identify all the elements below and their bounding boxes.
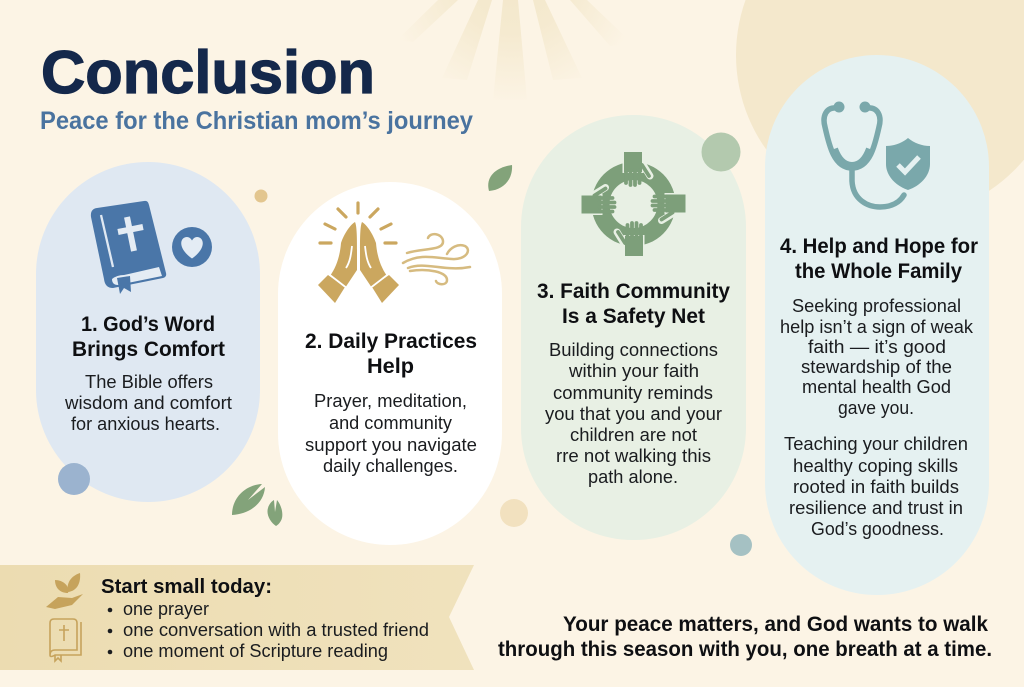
body text <box>545 340 722 487</box>
body text: paragraph one <box>780 296 974 418</box>
icon: stethoscope and shield <box>824 102 930 207</box>
background circle <box>736 0 1024 218</box>
body text: paragraph two: Teaching your children <box>784 434 968 454</box>
panel: Help and Hope <box>765 55 989 595</box>
icon: outlined Bible <box>50 619 81 661</box>
heading: 2. Daily Practices <box>305 330 477 353</box>
closing message <box>498 613 992 661</box>
closing message: through this season with you, one breath at a time. <box>498 638 992 661</box>
body text: Building connections <box>549 340 718 360</box>
body text: paragraph one: faith — it’s good <box>808 337 946 357</box>
bullet list: one prayer <box>123 599 209 619</box>
leaves <box>232 484 282 526</box>
panel: God's Word <box>36 162 260 502</box>
heading: Is a Safety Net <box>562 305 705 328</box>
body text <box>64 372 232 434</box>
body text: wisdom and comfort <box>64 393 232 413</box>
heading: Brings Comfort <box>72 338 225 361</box>
body text <box>305 391 477 476</box>
icon: sprout in hand <box>46 573 83 609</box>
decorative dot: blue <box>58 463 90 495</box>
panel: Faith Community <box>521 115 746 540</box>
leaf <box>488 165 512 191</box>
body text: children are not <box>570 425 697 445</box>
icon: praying hands <box>318 203 470 303</box>
body text: paragraph one: stewardship of the <box>801 357 952 377</box>
icon: wind <box>403 234 470 284</box>
icon: Bible with heart <box>91 201 212 294</box>
body text: within your faith <box>568 361 699 381</box>
heading: Help <box>367 355 414 378</box>
body text: rre not walking this <box>556 446 711 466</box>
panel: Daily Practices <box>278 182 502 545</box>
heading <box>780 235 978 283</box>
body text: The Bible offers <box>85 372 213 392</box>
body text: paragraph two <box>784 434 968 539</box>
bullet list: one moment of Scripture reading <box>123 641 388 661</box>
heading: 3. Faith Community <box>537 280 730 303</box>
body text: for anxious hearts. <box>71 414 220 434</box>
banner: start small today <box>0 565 474 670</box>
body text: paragraph two: God’s goodness. <box>811 519 944 539</box>
heading <box>537 280 730 328</box>
body text: you that you and your <box>545 404 722 424</box>
subtitle: Peace for the Christian mom’s journey <box>40 107 473 135</box>
body text: paragraph two: resilience and trust in <box>789 498 963 518</box>
decorative dot: teal <box>730 534 752 556</box>
heading: 1. God’s Word <box>81 313 215 336</box>
body text: paragraph one: mental health God <box>802 377 951 397</box>
decorative dot: tan <box>254 190 268 202</box>
background sun rays <box>397 0 633 100</box>
body text: support you navigate <box>305 435 477 455</box>
decorative dot: green <box>702 132 740 172</box>
body text: community reminds <box>553 383 713 403</box>
body text: and community <box>329 413 452 433</box>
decorative dot: tan <box>500 499 528 527</box>
body text: paragraph one: help isn’t a sign of weak <box>780 317 974 337</box>
body text: paragraph one: Seeking professional <box>792 296 961 316</box>
body text: path alone. <box>588 467 678 487</box>
heading: the Whole Family <box>795 260 962 283</box>
body text: paragraph two: healthy coping skills <box>793 456 958 476</box>
bullet list: one conversation with a trusted friend <box>123 620 429 640</box>
body text: paragraph one: gave you. <box>838 398 914 418</box>
heading: 4. Help and Hope for <box>780 235 978 258</box>
heading: Start small today: <box>101 576 272 598</box>
closing message: Your peace matters, and God wants to walk <box>563 613 988 636</box>
body text: daily challenges. <box>323 456 458 476</box>
heading <box>72 313 225 361</box>
body text: paragraph two: rooted in faith builds <box>793 477 959 497</box>
heading <box>305 330 477 378</box>
title: Conclusion <box>41 39 375 106</box>
icon: ring of hands <box>582 152 686 256</box>
bullet list <box>108 599 429 661</box>
body text: Prayer, meditation, <box>314 391 467 411</box>
